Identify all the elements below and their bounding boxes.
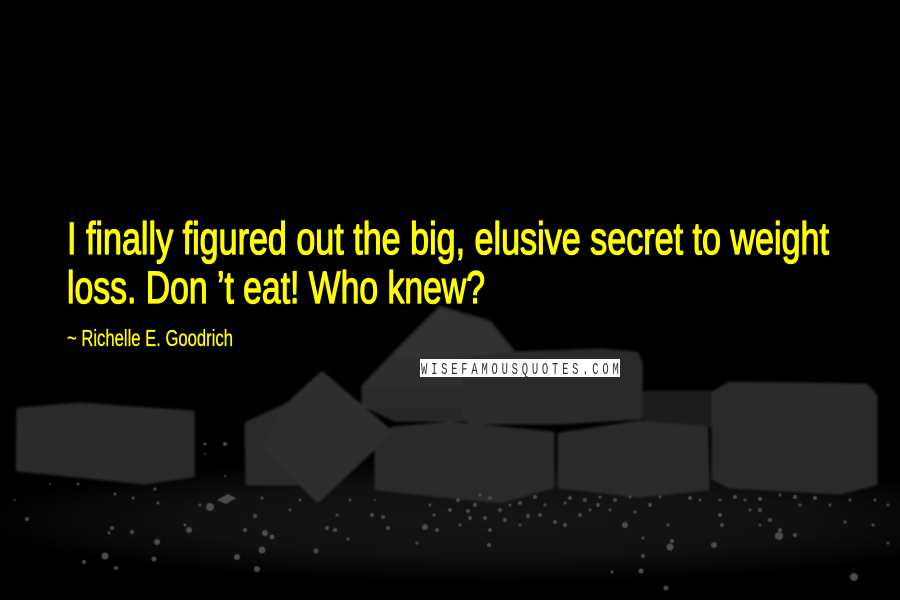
cube: upper right of pile [465, 351, 640, 422]
watermark badge: WISEFAMOUSQUOTES.COM [421, 361, 619, 380]
quote line 2: loss. Don ’t eat! Who knew? [67, 262, 485, 313]
cube: far left [18, 405, 192, 482]
cube: lower middle [377, 424, 552, 501]
author attribution: ~ Richelle E. Goodrich [67, 325, 233, 351]
cube: top of pile [363, 307, 520, 420]
cube: dim back right [645, 393, 710, 425]
cube: lower right of pile [560, 423, 707, 495]
sugar cubes [18, 307, 875, 501]
cube: tilted [264, 374, 390, 500]
cube: behind tilted cube [247, 404, 330, 483]
sugar grains [14, 442, 890, 590]
cube: far right [714, 384, 875, 492]
table surface [0, 458, 900, 582]
quote text [67, 213, 829, 313]
